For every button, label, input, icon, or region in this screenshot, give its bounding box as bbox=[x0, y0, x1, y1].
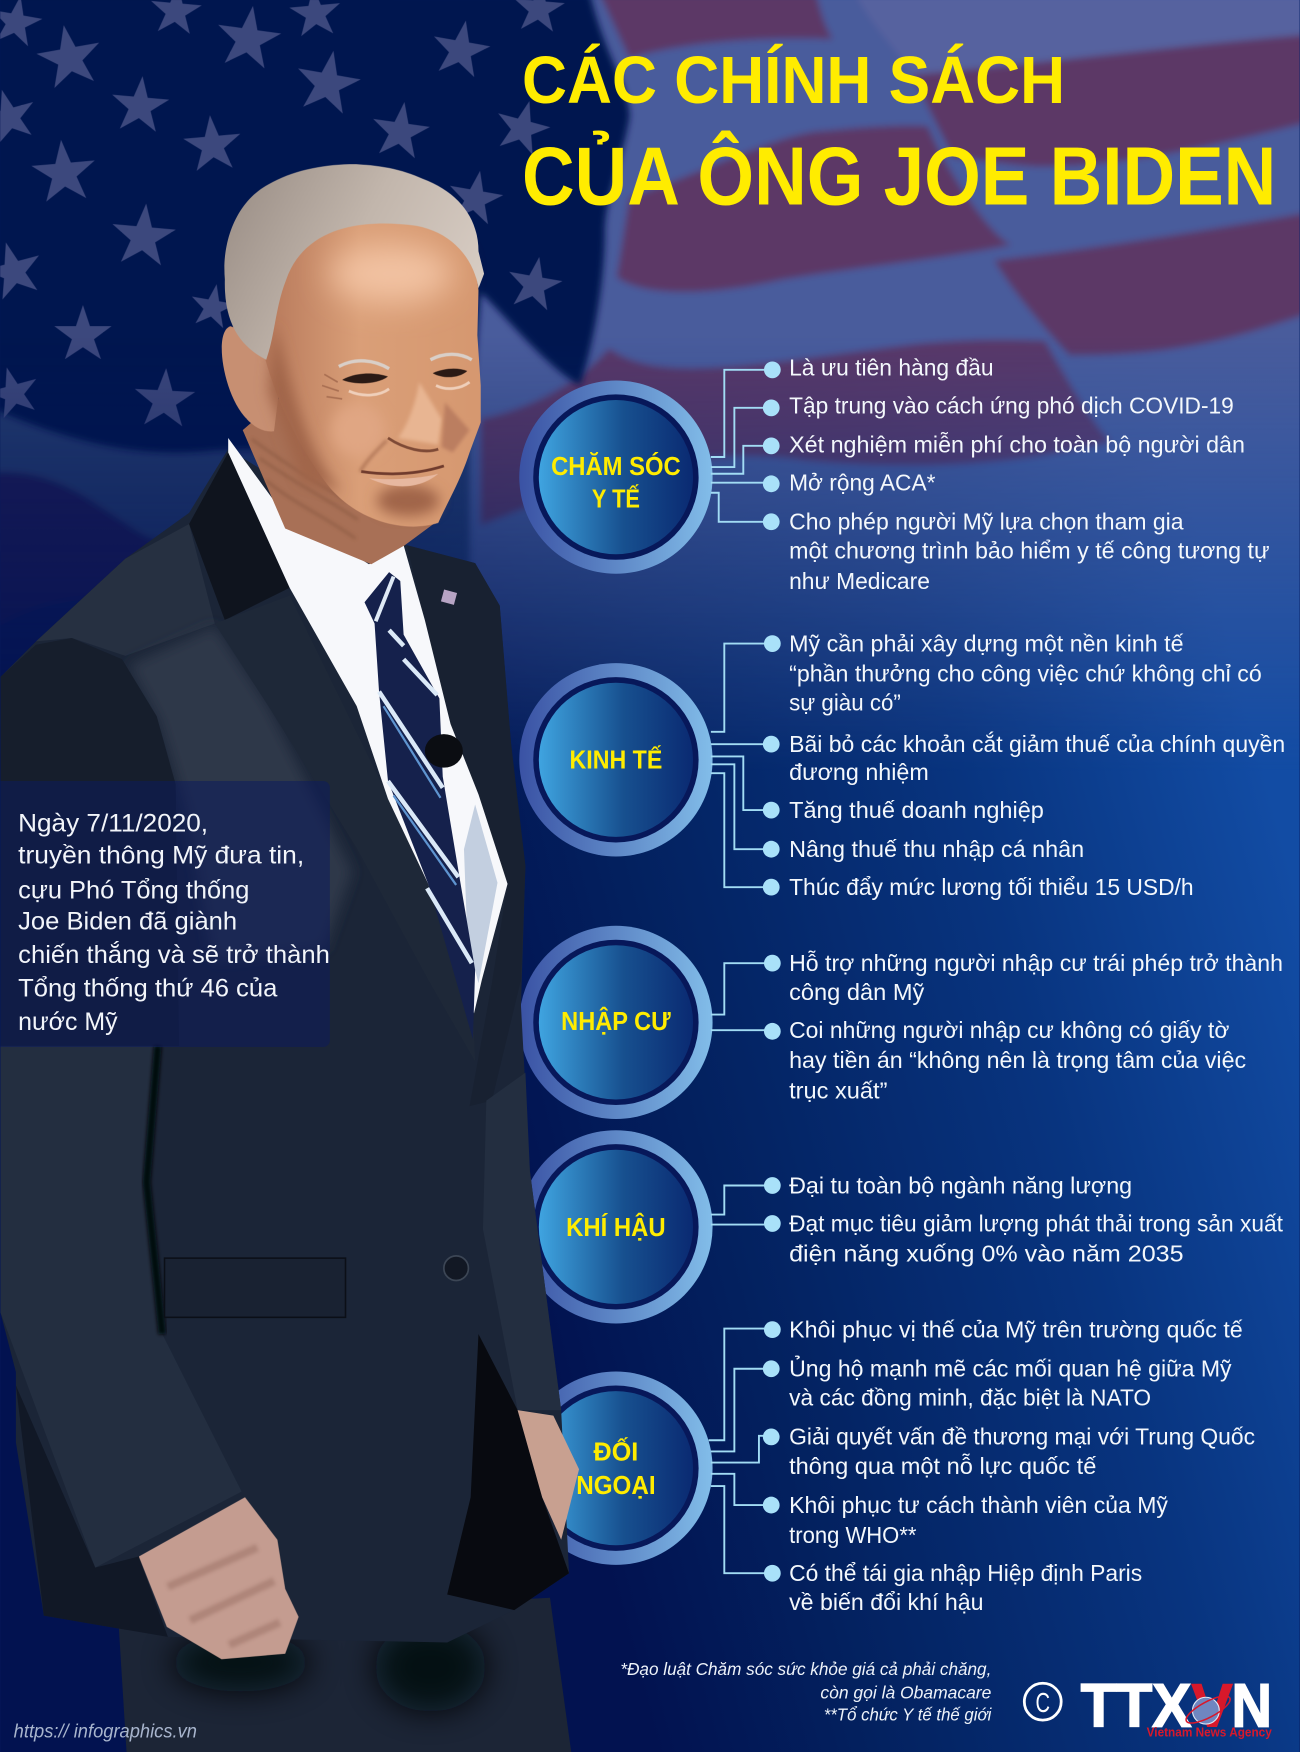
lavalier mic bbox=[425, 734, 463, 768]
right hand bbox=[518, 1410, 579, 1540]
left collar bbox=[189, 453, 290, 620]
connectors: khi hau bbox=[711, 1186, 767, 1225]
stars bbox=[0, 0, 567, 427]
list: y te: Mở rộng ACA* bbox=[789, 470, 935, 496]
jacket front edge bbox=[447, 1334, 569, 1610]
intro text: truyền thông Mỹ đưa tin, bbox=[18, 843, 304, 870]
logo globe bbox=[1183, 1691, 1233, 1728]
bullets: khi hau bbox=[764, 1177, 781, 1232]
trousers bbox=[119, 1598, 571, 1752]
list: nhap cu: công dân Mỹ bbox=[789, 979, 925, 1005]
list: y te: Là ưu tiên hàng đầu bbox=[789, 354, 994, 380]
title: CÁC CHÍNH SÁCH bbox=[522, 43, 1065, 118]
left hand bbox=[139, 1497, 299, 1659]
circle: y te bbox=[519, 380, 713, 574]
source url: https:// infographics.vn bbox=[14, 1721, 197, 1742]
jacket pocket bbox=[165, 1258, 346, 1317]
circle labels: NHẬP CƯ bbox=[561, 1006, 671, 1036]
circle labels: KINH TẾ bbox=[570, 746, 662, 775]
list: y te: Cho phép người Mỹ lựa chọn tham gia bbox=[789, 509, 1184, 535]
list: kinh te: Mỹ cần phải xây dựng một nền kinh tế bbox=[789, 630, 1184, 656]
intro text: chiến thắng và sẽ trở thành bbox=[18, 942, 330, 969]
intro text bbox=[18, 810, 330, 1036]
circle labels: NGOẠI bbox=[576, 1472, 656, 1500]
list: doi ngoai: trong WHO** bbox=[789, 1522, 916, 1548]
list: kinh te: Tăng thuế doanh nghiệp bbox=[789, 797, 1044, 823]
list: khi hau: điện năng xuống 0% vào năm 2035 bbox=[789, 1240, 1184, 1266]
list: kinh te: Thúc đẩy mức lương tối thiểu 15 USD/h bbox=[789, 874, 1194, 900]
logo: TTXVN: TTX bbox=[1081, 1671, 1191, 1740]
intro text: Ngày 7/11/2020, bbox=[18, 810, 208, 837]
list: khi hau: Đại tu toàn bộ ngành năng lượng bbox=[789, 1172, 1132, 1198]
list: y te: Xét nghiệm miễn phí cho toàn bộ người dân bbox=[789, 432, 1245, 458]
right sleeve bbox=[483, 1073, 561, 1410]
neck wrinkle shadows bbox=[252, 439, 358, 539]
mouth bbox=[361, 466, 444, 486]
list: doi ngoai: Khôi phục vị thế của Mỹ trên trường quốc tế bbox=[789, 1316, 1243, 1342]
footnotes: **Tổ chức Y tế thế giới bbox=[824, 1705, 992, 1725]
connectors: kinh te bbox=[711, 644, 767, 887]
list: nhap cu: trục xuất” bbox=[789, 1077, 887, 1103]
intro text: Tổng thống thứ 46 của bbox=[18, 976, 278, 1003]
footnotes: *Đạo luật Chăm sóc sức khỏe giá cả phải chăng, bbox=[620, 1659, 991, 1679]
list: kinh te: Bãi bỏ các khoản cắt giảm thuế của chính quyền bbox=[789, 731, 1285, 757]
lapel pin bbox=[441, 589, 457, 605]
photo: Joe Biden bbox=[0, 164, 579, 1752]
bullets: doi ngoai bbox=[763, 1321, 781, 1582]
intro text: nước Mỹ bbox=[18, 1009, 118, 1036]
right lapel bbox=[407, 545, 526, 873]
panel backdrop bbox=[0, 781, 330, 1047]
left lapel bbox=[225, 619, 256, 686]
list: doi ngoai: Có thể tái gia nhập Hiệp định Paris bbox=[789, 1560, 1142, 1586]
star field bbox=[0, 0, 629, 453]
list: doi ngoai: Ủng hộ mạnh mẽ các mối quan hệ giữa Mỹ bbox=[789, 1354, 1232, 1382]
bullets: nhap cu bbox=[764, 955, 781, 1040]
list: nhap cu: Hỗ trợ những người nhập cư trái phép trở thành bbox=[789, 950, 1283, 976]
circle labels: CHĂM SÓC bbox=[551, 451, 681, 481]
list: y te: Tập trung vào cách ứng phó dịch COVID-19 bbox=[789, 392, 1234, 418]
circle: khi hau bbox=[519, 1130, 713, 1323]
neck bbox=[243, 369, 439, 564]
shirt shadow bbox=[464, 804, 497, 983]
logo: TTXVN: V bbox=[1191, 1671, 1233, 1740]
list: doi ngoai: Giải quyết vấn đề thương mại với Trung Quốc bbox=[789, 1424, 1255, 1450]
suit jacket bbox=[0, 449, 569, 1642]
circle labels bbox=[551, 451, 681, 1500]
list: doi ngoai bbox=[789, 1316, 1255, 1615]
list: nhap cu: hay tiền án “không nên là trọng tâm của việc bbox=[789, 1047, 1246, 1073]
logo: TTXVN: Vietnam News Agency bbox=[1147, 1724, 1273, 1739]
circle: nhap cu bbox=[519, 926, 713, 1119]
list: doi ngoai: và các đồng minh, đặc biệt là NATO bbox=[789, 1385, 1151, 1411]
circle: doi ngoai bbox=[519, 1372, 713, 1565]
logo: TTXVN bbox=[1081, 1671, 1273, 1740]
copyright symbol: C bbox=[1035, 1687, 1050, 1718]
flag artwork bbox=[0, 0, 1300, 714]
list: nhap cu: Coi những người nhập cư không có giấy tờ bbox=[789, 1017, 1229, 1043]
footnotes bbox=[620, 1659, 992, 1725]
connectors: nhap cu bbox=[711, 963, 767, 1030]
face bbox=[259, 219, 481, 527]
left waves bbox=[0, 410, 472, 620]
left hand shading bbox=[168, 1548, 280, 1645]
list: nhap cu bbox=[789, 950, 1283, 1103]
list: kinh te bbox=[789, 630, 1285, 900]
intro text panel bbox=[0, 781, 330, 1047]
bullets: y te bbox=[763, 361, 781, 530]
intro text: Joe Biden đã giành bbox=[18, 909, 237, 936]
list: khi hau: Đạt mục tiêu giảm lượng phát thải trong sản xuất bbox=[789, 1210, 1283, 1236]
list: y te: như Medicare bbox=[789, 568, 930, 594]
ear bbox=[222, 326, 282, 431]
bullets: kinh te bbox=[763, 635, 781, 896]
nose bbox=[360, 382, 470, 472]
title bbox=[522, 43, 1276, 222]
tie bbox=[365, 572, 475, 1039]
circle labels: Y TẾ bbox=[592, 484, 640, 513]
hair bbox=[224, 164, 484, 360]
list: kinh te: sự giàu có” bbox=[789, 690, 901, 716]
circle: kinh te bbox=[519, 663, 713, 856]
list: kinh te: đương nhiệm bbox=[789, 759, 929, 785]
intro text: cựu Phó Tổng thống bbox=[18, 877, 249, 904]
jacket button bbox=[444, 1256, 468, 1280]
eyes and brows bbox=[322, 354, 472, 399]
list: y te: một chương trình bảo hiểm y tế công tương tự bbox=[789, 538, 1270, 564]
circle labels: ĐỐI bbox=[594, 1436, 638, 1466]
list: doi ngoai: thông qua một nỗ lực quốc tế bbox=[789, 1453, 1096, 1479]
jacket shading bbox=[0, 453, 569, 1637]
circle labels: KHÍ HẬU bbox=[566, 1212, 666, 1242]
face highlights bbox=[268, 245, 453, 516]
connectors: doi ngoai bbox=[709, 1329, 767, 1573]
footnotes: còn gọi là Obamacare bbox=[820, 1682, 991, 1702]
list: doi ngoai: về biến đổi khí hậu bbox=[789, 1589, 984, 1615]
logo: TTXVN: N bbox=[1232, 1671, 1272, 1740]
list: kinh te: “phần thưởng cho công việc chứ không chỉ có bbox=[789, 661, 1262, 687]
shirt bbox=[228, 438, 508, 1013]
trouser shadows bbox=[171, 1622, 486, 1712]
list: kinh te: Nâng thuế thu nhập cá nhân bbox=[789, 836, 1084, 862]
connectors: y te bbox=[711, 370, 767, 522]
copyright symbol bbox=[1024, 1683, 1061, 1720]
list: doi ngoai: Khôi phục tư cách thành viên của Mỹ bbox=[789, 1492, 1168, 1518]
list: y te bbox=[789, 354, 1270, 594]
flag stripes bbox=[466, 0, 1300, 714]
list: khi hau bbox=[789, 1172, 1283, 1266]
